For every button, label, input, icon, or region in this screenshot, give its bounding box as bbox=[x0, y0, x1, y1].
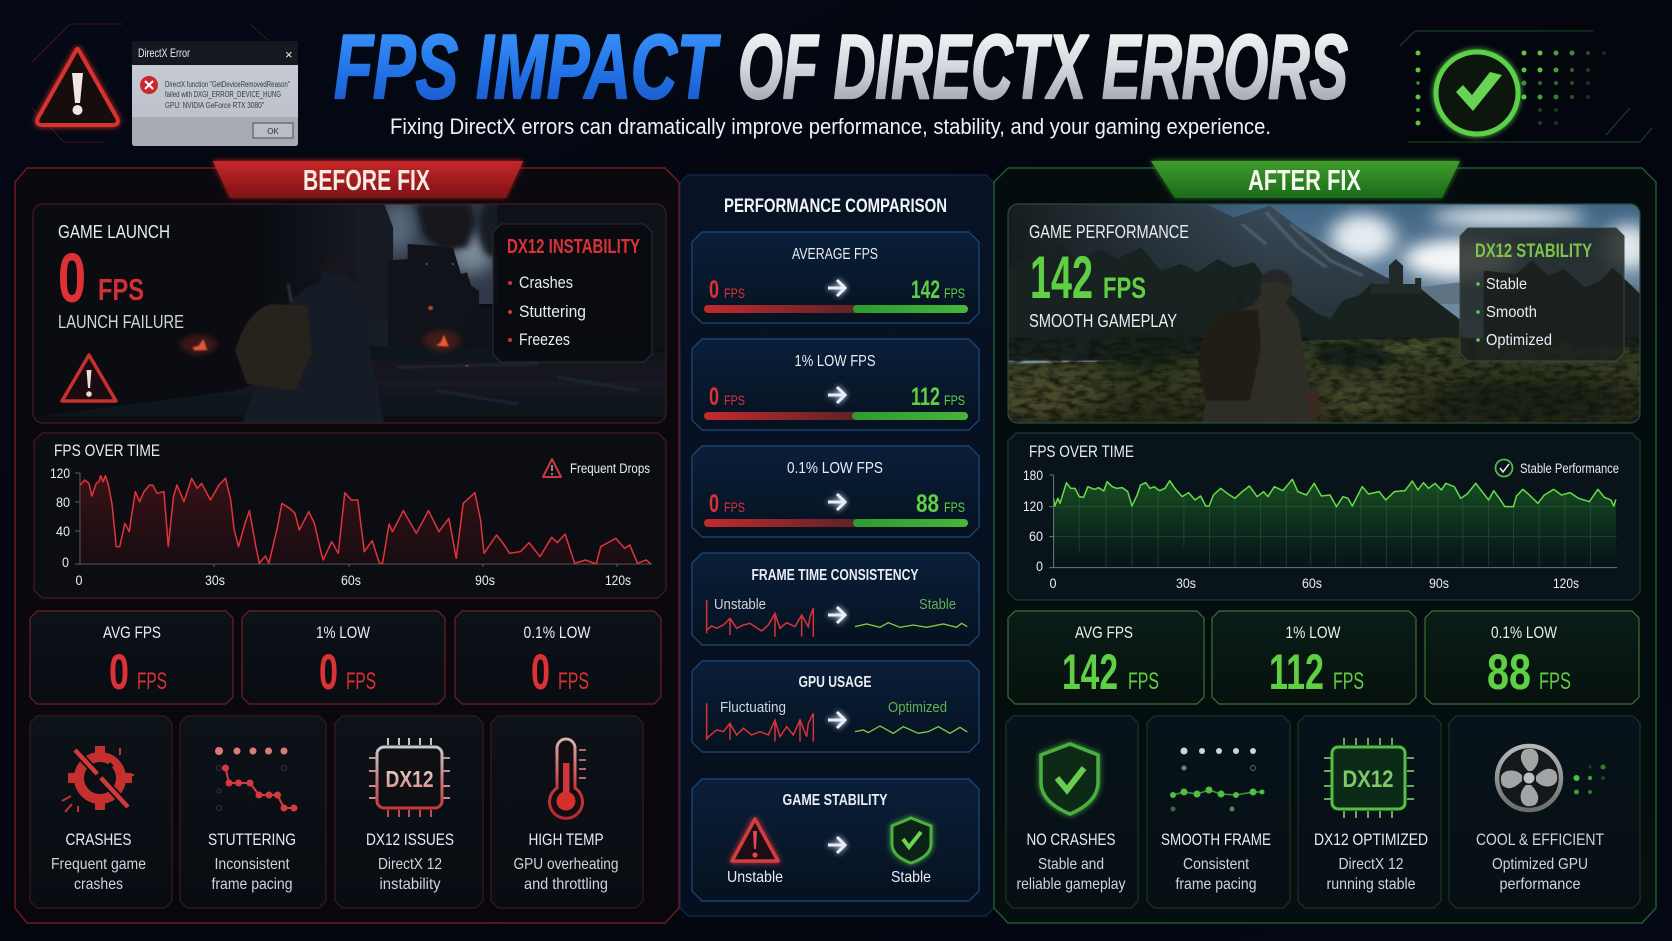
error dialog window: GPU: NVIDIA GeForce RTX 3080" bbox=[165, 101, 264, 110]
stat: 1% low: FPS bbox=[1333, 668, 1364, 695]
chart: fps over time before fix: FPS OVER TIME bbox=[54, 441, 160, 460]
card: smooth frame bbox=[1147, 716, 1290, 908]
stat: 1% low: 0 bbox=[319, 644, 338, 700]
chart: fps over time after fix: 120s bbox=[1553, 575, 1579, 591]
icon: stutter dots bbox=[215, 747, 298, 812]
stat: 1% low bbox=[242, 611, 445, 704]
stats row before fix bbox=[30, 611, 661, 704]
icon: green check circle bbox=[1436, 52, 1518, 134]
card: high temp: and throttling bbox=[524, 876, 608, 893]
card: no crashes bbox=[1006, 716, 1138, 908]
error dialog window: OK bbox=[267, 127, 279, 136]
chart: fps over time before fix: 0 bbox=[62, 554, 69, 570]
stats row after fix bbox=[1008, 611, 1639, 704]
error dialog window: failed with DXGI_ERROR_DEVICE_HUNG bbox=[165, 90, 281, 99]
legend: frequent drops bbox=[543, 459, 650, 477]
card: high temp bbox=[491, 716, 643, 908]
panel: after fix bbox=[984, 161, 1656, 923]
card: cool and efficient bbox=[1449, 716, 1640, 908]
chart: fps over time after fix: 180 bbox=[1023, 467, 1043, 483]
chart: fps over time after fix bbox=[1008, 433, 1640, 600]
soldier figure bbox=[1197, 269, 1318, 423]
icon: green shield bbox=[1041, 744, 1098, 814]
chart: fps over time after fix: 60s bbox=[1302, 575, 1322, 591]
panel: performance comparison bbox=[680, 175, 994, 916]
stat: 0.1% low: FPS bbox=[558, 668, 589, 695]
heading: PERFORMANCE COMPARISON bbox=[724, 196, 947, 217]
stat: 1% low bbox=[1212, 611, 1416, 704]
stat: 0.1% low bbox=[455, 611, 661, 704]
stat: 1% low: 1% LOW bbox=[1286, 623, 1340, 642]
callout: dx12 instability: Crashes bbox=[519, 273, 573, 292]
stat: avg fps: AVG FPS bbox=[1075, 623, 1133, 642]
callout: dx12 instability: DX12 INSTABILITY bbox=[507, 236, 640, 258]
error dialog window: DirectX Error bbox=[138, 46, 190, 60]
legend: stable performance: Stable Performance bbox=[1520, 461, 1619, 476]
chart: fps over time after fix: 60 bbox=[1029, 528, 1043, 544]
card: dx12 optimized: DirectX 12 bbox=[1338, 856, 1404, 873]
game performance readout bbox=[1029, 222, 1189, 331]
card: average fps bbox=[692, 232, 979, 323]
title: FPS IMPACT bbox=[334, 17, 721, 118]
card: cool and efficient: COOL & EFFICIENT bbox=[1476, 830, 1604, 849]
card: 1% low fps bbox=[692, 339, 979, 430]
icon: thermometer bbox=[550, 739, 586, 818]
stat: 1% low: 112 bbox=[1269, 644, 1324, 700]
icon: dx12 chip red bbox=[369, 738, 450, 817]
chart: fps over time after fix: 90s bbox=[1429, 575, 1449, 591]
card: 0.1% low fps: 0.1% LOW FPS bbox=[787, 460, 883, 477]
stat: 0.1% low: 0.1% LOW bbox=[524, 623, 590, 642]
card: no crashes: reliable gameplay bbox=[1016, 876, 1126, 893]
stat: avg fps: AVG FPS bbox=[103, 623, 161, 642]
icon: dx12 chip green: DX12 bbox=[1342, 766, 1394, 793]
icon: dx12 chip green bbox=[1324, 738, 1414, 818]
banner: after fix bbox=[1151, 161, 1460, 198]
card: average fps: AVERAGE FPS bbox=[792, 246, 878, 263]
card: 1% low fps: FPS bbox=[724, 392, 745, 408]
benefit cards after fix bbox=[1006, 716, 1640, 908]
callout: dx12 stability bbox=[1460, 228, 1624, 361]
card: average fps: 0 bbox=[709, 276, 719, 304]
card: dx12 issues: DirectX 12 bbox=[378, 856, 442, 873]
stat: avg fps: FPS bbox=[1128, 668, 1159, 695]
callout: dx12 stability: DX12 STABILITY bbox=[1475, 241, 1592, 262]
game performance readout: GAME PERFORMANCE bbox=[1029, 222, 1189, 242]
stat: avg fps bbox=[30, 611, 233, 704]
card: game stability: Stable bbox=[891, 869, 931, 886]
legend: frequent drops: Frequent Drops bbox=[570, 461, 650, 476]
card: crashes: crashes bbox=[74, 876, 123, 893]
stat: 0.1% low: 88 bbox=[1487, 644, 1531, 700]
card: dx12 issues: instability bbox=[380, 876, 440, 893]
card: average fps: FPS bbox=[944, 285, 965, 301]
card: crashes: CRASHES bbox=[66, 830, 132, 849]
card: game stability: Unstable bbox=[727, 869, 783, 886]
stat: 0.1% low: 0 bbox=[531, 644, 550, 700]
stat: avg fps: FPS bbox=[137, 668, 167, 695]
stat: 0.1% low: FPS bbox=[1539, 668, 1571, 695]
soldier silhouette bbox=[235, 257, 384, 423]
game launch readout: 0 bbox=[58, 239, 86, 317]
card: 1% low fps: 1% LOW FPS bbox=[794, 353, 876, 370]
card: dx12 optimized: DX12 OPTIMIZED bbox=[1314, 830, 1428, 849]
card: 1% low fps: 112 bbox=[911, 383, 940, 411]
card: 1% low fps: FPS bbox=[944, 392, 965, 408]
card: no crashes: Stable and bbox=[1038, 856, 1104, 873]
card: game stability bbox=[692, 779, 979, 901]
callout: dx12 instability: Freezes bbox=[519, 330, 570, 349]
card: 0.1% low fps bbox=[692, 446, 979, 537]
panel: game launch scene bbox=[33, 197, 666, 423]
chart: fps over time after fix: 0 bbox=[1036, 558, 1043, 574]
card: crashes bbox=[30, 716, 172, 908]
icon: red warning triangle bbox=[37, 49, 118, 125]
card: game stability: GAME STABILITY bbox=[782, 792, 888, 809]
panel: game performance scene bbox=[984, 204, 1653, 423]
icon: dx12 chip red: DX12 bbox=[386, 766, 434, 792]
game launch readout: GAME LAUNCH bbox=[58, 222, 170, 242]
error dialog window bbox=[132, 41, 298, 146]
chart: fps over time after fix: 0 bbox=[1050, 575, 1057, 591]
icon: smooth dots bbox=[1170, 748, 1264, 812]
legend: stable performance bbox=[1496, 460, 1619, 476]
card: stuttering: frame pacing bbox=[212, 876, 292, 893]
icon: stable shield bbox=[892, 818, 931, 863]
card: smooth frame: Consistent bbox=[1183, 856, 1249, 873]
chart: fps over time before fix: 80 bbox=[56, 494, 70, 510]
stat: avg fps: 0 bbox=[109, 644, 129, 700]
title bbox=[334, 17, 1348, 118]
icon: broken gear bbox=[62, 746, 134, 812]
callout: dx12 stability: Smooth bbox=[1486, 304, 1537, 321]
chart: fps over time before fix: 60s bbox=[341, 572, 361, 588]
stat: 1% low: 1% LOW bbox=[316, 623, 370, 642]
chart: fps over time before fix: 40 bbox=[56, 523, 70, 539]
subtitle: Fixing DirectX errors can dramatically improve performance, stability, and your gaming experience. bbox=[390, 114, 1271, 139]
card: stuttering: Inconsistent bbox=[214, 856, 290, 873]
card: average fps: 142 bbox=[911, 276, 940, 304]
callout: dx12 instability bbox=[493, 224, 652, 362]
stat: 0.1% low bbox=[1425, 611, 1639, 704]
banner: after fix: AFTER FIX bbox=[1248, 165, 1361, 197]
stat: avg fps bbox=[1008, 611, 1204, 704]
card: frame time consistency bbox=[692, 553, 979, 645]
card: high temp: HIGH TEMP bbox=[528, 830, 604, 849]
issue cards before fix bbox=[30, 716, 643, 908]
chart: fps over time after fix: 120 bbox=[1023, 498, 1043, 514]
banner: before fix: BEFORE FIX bbox=[303, 165, 430, 197]
card: gpu usage bbox=[692, 661, 979, 752]
card: gpu usage: Fluctuating bbox=[720, 699, 786, 716]
card: gpu usage: Optimized bbox=[888, 699, 947, 716]
card: dx12 optimized: running stable bbox=[1326, 876, 1416, 893]
card: 0.1% low fps: 0 bbox=[709, 490, 719, 518]
icon: cooling fan bbox=[1497, 746, 1606, 810]
header: green check badge bbox=[1400, 31, 1652, 142]
panel: before fix bbox=[15, 161, 679, 923]
game performance readout: FPS bbox=[1103, 272, 1146, 305]
game launch readout bbox=[58, 222, 184, 332]
card: stuttering bbox=[180, 716, 326, 908]
error dialog window: × bbox=[285, 47, 293, 62]
card: dx12 issues bbox=[335, 716, 483, 908]
chart: fps over time before fix: 30s bbox=[205, 572, 225, 588]
chart: fps over time before fix bbox=[34, 433, 666, 598]
chart: fps over time before fix: 90s bbox=[475, 572, 495, 588]
card: smooth frame: SMOOTH FRAME bbox=[1161, 830, 1271, 849]
game performance readout: 142 bbox=[1030, 244, 1093, 311]
game launch readout: LAUNCH FAILURE bbox=[58, 312, 184, 332]
chart: fps over time before fix: 120s bbox=[605, 572, 631, 588]
stat: 0.1% low: 0.1% LOW bbox=[1491, 623, 1557, 642]
stat: avg fps: 142 bbox=[1062, 644, 1118, 700]
banner: before fix bbox=[213, 161, 523, 198]
card: gpu usage: GPU USAGE bbox=[798, 674, 872, 691]
card: no crashes: NO CRASHES bbox=[1026, 830, 1116, 849]
chart: fps over time before fix: 120 bbox=[50, 465, 70, 481]
error dialog window: DirectX function "GetDeviceRemovedReason" bbox=[165, 80, 290, 89]
game performance readout: SMOOTH GAMEPLAY bbox=[1029, 311, 1177, 331]
callout: dx12 stability: Stable bbox=[1486, 276, 1527, 293]
card: smooth frame: frame pacing bbox=[1176, 876, 1256, 893]
card: 1% low fps: 0 bbox=[709, 383, 719, 411]
card: frame time consistency: Unstable bbox=[714, 596, 766, 613]
card: cool and efficient: performance bbox=[1500, 876, 1581, 893]
card: dx12 issues: DX12 ISSUES bbox=[366, 830, 454, 849]
game launch readout: FPS bbox=[98, 272, 144, 307]
card: frame time consistency: Stable bbox=[919, 596, 956, 613]
callout: dx12 instability: Stuttering bbox=[519, 302, 586, 321]
card: stuttering: STUTTERING bbox=[208, 830, 296, 849]
icon: warning triangle bbox=[62, 355, 116, 401]
icon: unstable triangle bbox=[732, 819, 778, 861]
card: dx12 optimized bbox=[1298, 716, 1441, 908]
card: frame time consistency: FRAME TIME CONSISTENCY bbox=[752, 567, 919, 584]
chart: fps over time after fix: FPS OVER TIME bbox=[1029, 442, 1134, 461]
card: 0.1% low fps: FPS bbox=[724, 499, 745, 515]
header: broken alert and error dialog bbox=[32, 24, 298, 146]
card: 0.1% low fps: FPS bbox=[944, 499, 965, 515]
card: cool and efficient: Optimized GPU bbox=[1492, 856, 1588, 873]
card: average fps: FPS bbox=[724, 285, 745, 301]
card: crashes: Frequent game bbox=[51, 856, 146, 873]
stat: 1% low: FPS bbox=[346, 668, 376, 695]
card: high temp: GPU overheating bbox=[514, 856, 618, 873]
chart: fps over time after fix: 30s bbox=[1176, 575, 1196, 591]
card: 0.1% low fps: 88 bbox=[916, 490, 939, 518]
callout: dx12 stability: Optimized bbox=[1486, 332, 1552, 349]
chart: fps over time before fix: 0 bbox=[76, 572, 83, 588]
